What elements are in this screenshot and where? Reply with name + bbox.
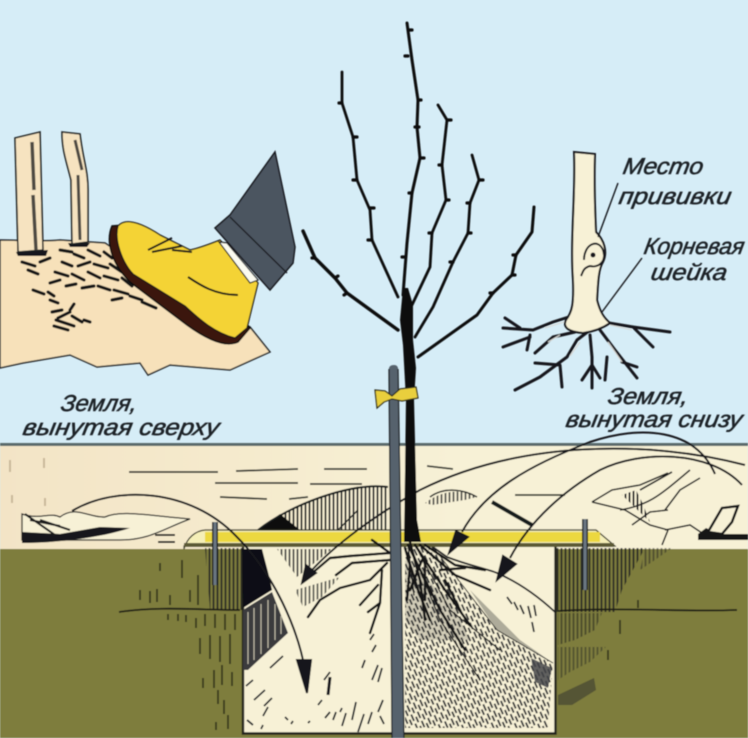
sapling roots in the pit bbox=[308, 540, 500, 680]
panel: foot compacting soil around stakes bbox=[0, 132, 295, 375]
hatching on pit walls in ground bbox=[119, 548, 737, 730]
label: root collar bbox=[642, 233, 747, 285]
loose soil dashes bbox=[246, 634, 384, 732]
hatch patches beside roots bbox=[277, 549, 332, 577]
arrows showing soil being returned bbox=[72, 432, 745, 693]
soil crumbs bbox=[22, 250, 156, 330]
olive ground bbox=[0, 549, 748, 738]
boot laces and crease bbox=[148, 238, 238, 295]
panel: root collar detail bbox=[503, 152, 670, 390]
label: soil taken from the top bbox=[21, 390, 223, 440]
boot upper bbox=[117, 222, 258, 338]
grey hatched wall bbox=[243, 592, 288, 670]
supporting pole bbox=[389, 365, 404, 738]
soil patch bbox=[0, 240, 270, 375]
sock bbox=[219, 242, 258, 283]
label: graft site: Место bbox=[621, 153, 706, 179]
leader lines bbox=[598, 183, 642, 312]
yellow tie on the pole bbox=[375, 387, 418, 408]
yellow board across the pit bbox=[184, 530, 615, 549]
cream strip of ground surface bbox=[0, 443, 748, 550]
label: soil taken from the bottom: вынутая снизу bbox=[564, 406, 746, 432]
sapling bbox=[303, 23, 534, 542]
label: root collar: Корневая bbox=[642, 233, 747, 259]
black wedge of the pit wall bbox=[242, 549, 272, 608]
left stake bbox=[15, 132, 43, 252]
label: soil taken from the top: вынутая сверху bbox=[21, 414, 223, 440]
graft knob bbox=[581, 244, 604, 276]
trouser leg bbox=[215, 152, 295, 290]
pegs holding the board bbox=[215, 519, 585, 590]
stem and root crown bbox=[565, 152, 610, 333]
planting pit bbox=[242, 540, 556, 734]
right stake bbox=[62, 132, 88, 244]
roots bbox=[503, 315, 670, 390]
label: soil taken from the bottom bbox=[564, 383, 746, 432]
right heap and scribbles bbox=[592, 470, 748, 545]
boot sole bbox=[109, 225, 250, 344]
left heap of topsoil bbox=[22, 512, 190, 543]
label: graft site bbox=[617, 153, 734, 209]
label: soil taken from the top: Земля, bbox=[59, 390, 140, 416]
label: soil taken from the bottom: Земля, bbox=[606, 383, 691, 409]
label: graft site: прививки bbox=[617, 183, 734, 209]
label: root collar: шейка bbox=[649, 259, 730, 285]
upper soil mound with hatching bbox=[258, 486, 532, 530]
